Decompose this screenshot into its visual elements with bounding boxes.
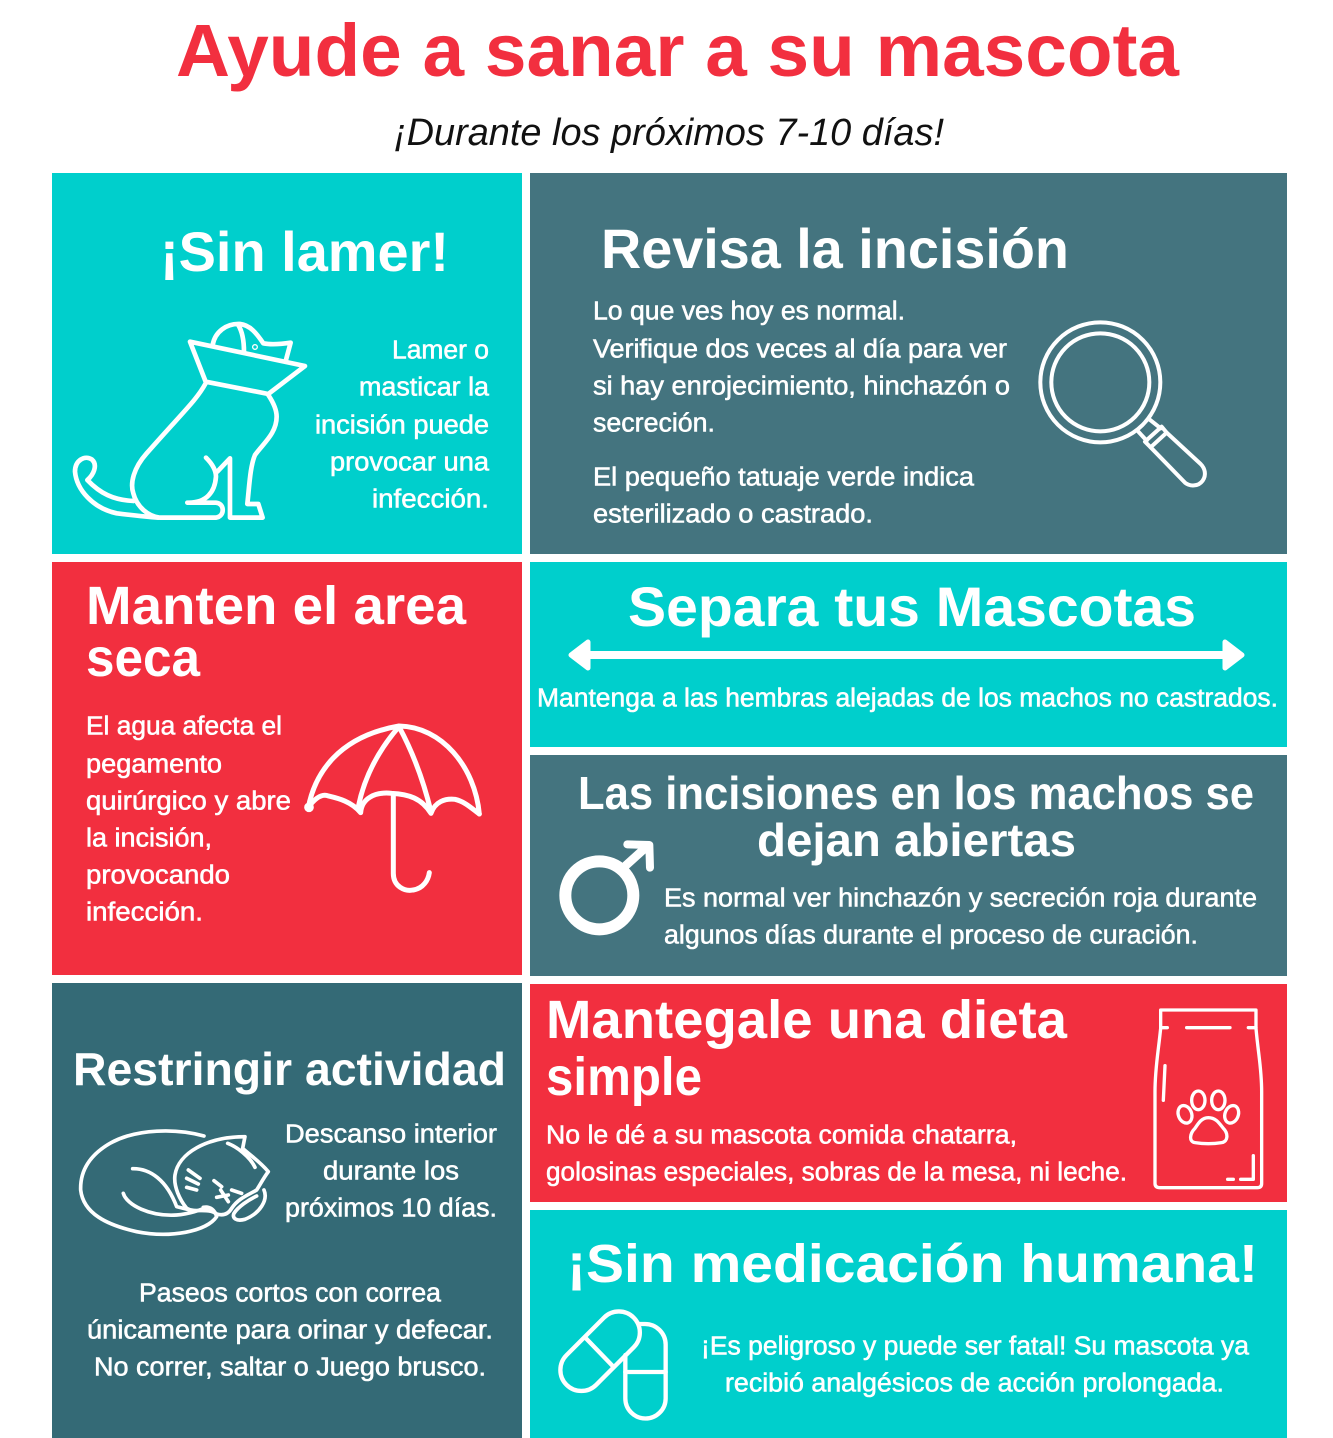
- heading: restringir actividad: Restringir actividad: [73, 1043, 506, 1095]
- text: sin lamer body: Lamer o: [392, 336, 489, 364]
- panel: dieta simple: [530, 984, 1287, 1202]
- text: dieta body: golosinas especiales, sobras de la mesa, ni leche.: [546, 1158, 1127, 1186]
- text: revisa body: si hay enrojecimiento, hinchazón o: [593, 372, 1010, 400]
- heading: manten el area seca: Manten el area: [86, 576, 467, 636]
- text: descanso: próximos 10 días.: [285, 1194, 497, 1222]
- text: descanso: durante los: [323, 1157, 459, 1185]
- text: paseos: únicamente para orinar y defecar.: [87, 1316, 493, 1344]
- heading: dieta simple: simple: [546, 1047, 702, 1107]
- heading: separa tus mascotas: Separa tus Mascotas: [628, 575, 1196, 638]
- heading: dieta simple: Mantegale una dieta: [546, 990, 1068, 1050]
- text: manten body: la incisión,: [86, 824, 212, 852]
- heading: revisa la incision: Revisa la incisión: [601, 217, 1069, 280]
- panel: incisiones en machos: [530, 755, 1287, 976]
- heading: sin medicacion humana: ¡Sin medicación humana!: [567, 1234, 1258, 1294]
- panel: manten el area seca: [52, 562, 522, 975]
- text: machos body: [664, 884, 1257, 949]
- text: paseos: Paseos cortos con correa: [139, 1279, 442, 1307]
- icon: magnifying glass: [1040, 322, 1205, 485]
- title: Ayude a sanar a su mascota: [176, 9, 1180, 92]
- text: manten body: [86, 712, 291, 926]
- text: manten body: El agua afecta el: [86, 712, 282, 740]
- text: medicacion body: [701, 1332, 1250, 1397]
- text: sin lamer body: infección.: [372, 485, 489, 513]
- text: manten body: quirúrgico y abre: [86, 787, 291, 815]
- text: machos body: algunos días durante el proceso de curación.: [664, 921, 1198, 949]
- heading: manten el area seca: [86, 576, 467, 688]
- heading: dieta simple: [546, 990, 1068, 1107]
- icon: pet food bag: [1155, 1010, 1262, 1188]
- icon: pills: [552, 1303, 666, 1418]
- text: paseos: [87, 1279, 493, 1381]
- icon: male symbol: [565, 844, 650, 929]
- arrow: double headed: [571, 642, 1242, 668]
- icon: umbrella: [307, 726, 479, 890]
- heading: incisiones en machos: dejan abiertas: [757, 814, 1076, 866]
- text: revisa body: El pequeño tatuaje verde indica: [593, 463, 975, 491]
- text: medicacion body: recibió analgésicos de acción prolongada.: [725, 1369, 1224, 1397]
- text: revisa body: secreción.: [593, 409, 715, 437]
- text: dieta body: [546, 1121, 1127, 1186]
- text: paseos: No correr, saltar o Juego brusco.: [94, 1353, 486, 1381]
- heading: sin lamer: ¡Sin lamer!: [160, 220, 449, 283]
- text: revisa body: [593, 297, 1010, 528]
- text: revisa body: Verifique dos veces al día para ver: [593, 335, 1008, 363]
- text: medicacion body: ¡Es peligroso y puede ser fatal! Su mascota ya: [701, 1332, 1250, 1360]
- text: manten body: infección.: [86, 898, 203, 926]
- text: revisa body: Lo que ves hoy es normal.: [593, 297, 905, 325]
- text: machos body: Es normal ver hinchazón y secreción roja durante: [664, 884, 1257, 912]
- text: manten body: pegamento: [86, 750, 222, 778]
- text: sin lamer body: incisión puede: [315, 411, 489, 439]
- heading: incisiones en machos: Las incisiones en los machos se: [578, 767, 1254, 819]
- text: descanso: Descanso interior: [285, 1120, 498, 1148]
- text: separa body: Mantenga a las hembras alejadas de los machos no castrados.: [537, 684, 1278, 712]
- panel: sin lamer: [52, 173, 522, 554]
- panel: revisa la incision: [530, 173, 1287, 554]
- text: descanso: [285, 1120, 498, 1222]
- panel: restringir actividad: [52, 983, 522, 1438]
- text: manten body: provocando: [86, 861, 230, 889]
- heading: incisiones en machos: [578, 767, 1254, 866]
- subtitle: ¡Durante los próximos 7-10 días!: [394, 112, 944, 154]
- text: dieta body: No le dé a su mascota comida chatarra,: [546, 1121, 1017, 1149]
- icon: dog with cone: [75, 324, 305, 518]
- text: revisa body: esterilizado o castrado.: [593, 500, 873, 528]
- panel: sin medicacion humana: [530, 1210, 1287, 1438]
- text: sin lamer body: masticar la: [359, 373, 490, 401]
- panel: separa tus mascotas: [530, 562, 1287, 747]
- text: sin lamer body: [315, 336, 490, 513]
- text: sin lamer body: provocar una: [330, 448, 490, 476]
- icon: sleeping cat: [81, 1131, 268, 1234]
- heading: manten el area seca: seca: [86, 628, 201, 688]
